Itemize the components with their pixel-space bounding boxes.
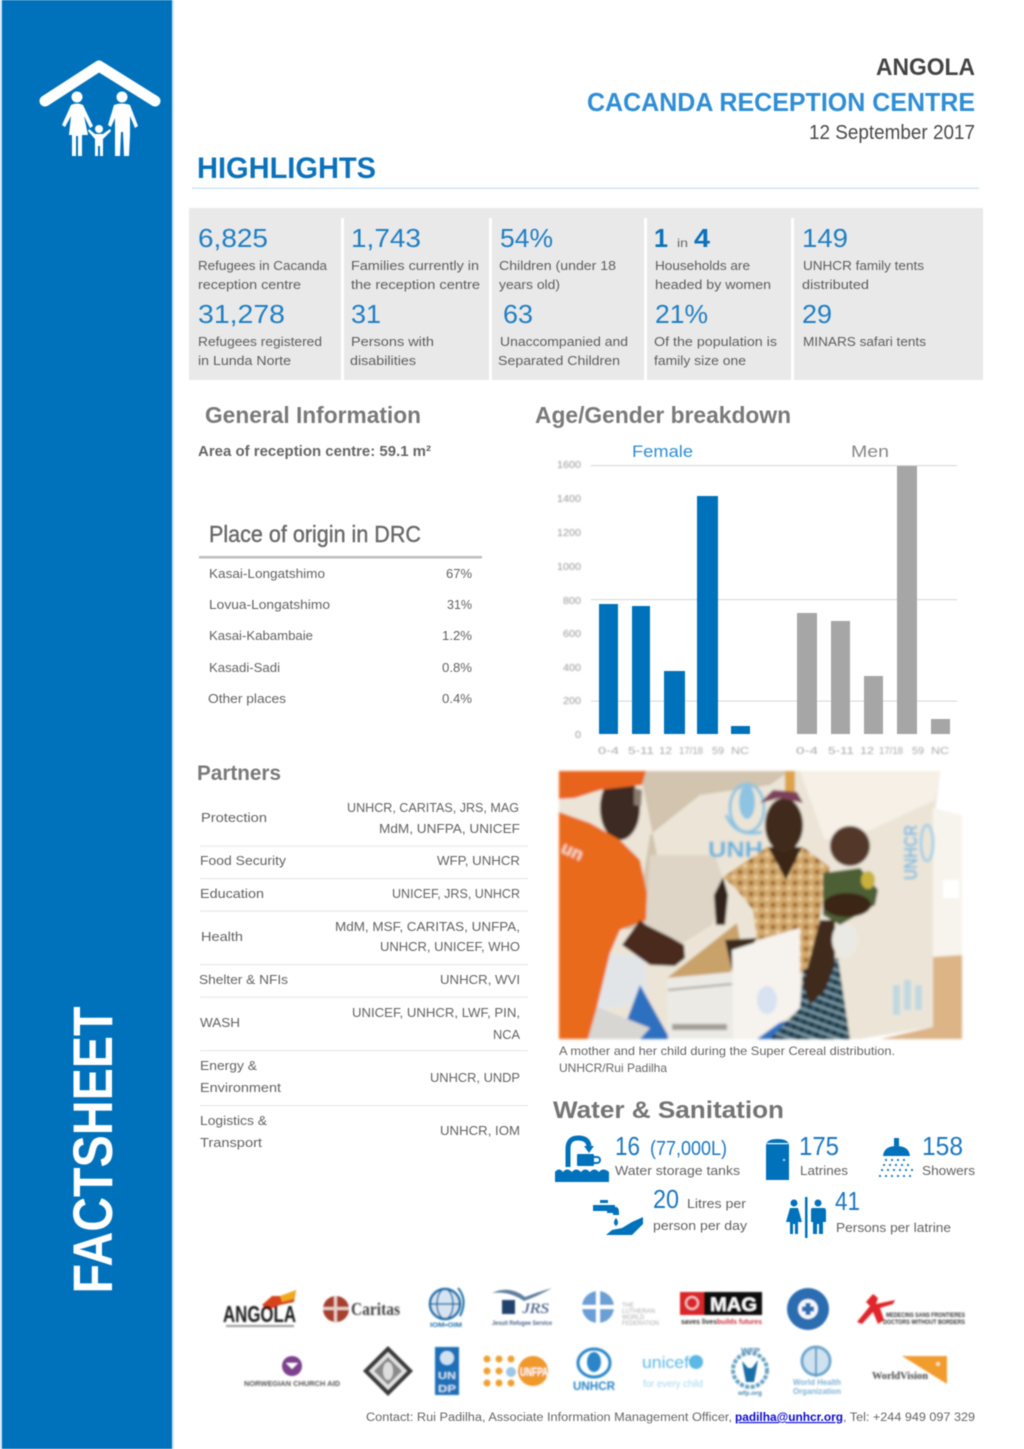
- bar chart: [557, 442, 957, 757]
- logo: Lutheran World Federation: WORLD: [622, 1315, 645, 1321]
- highlight column 3: Separated Children: [498, 353, 620, 368]
- logo: MSF: DOCTORS WITHOUT BORDERS: [883, 1320, 965, 1326]
- partners table rows: MdM, UNFPA, UNICEF: [379, 821, 520, 836]
- highlight column 4: Of the population is: [654, 334, 778, 349]
- highlight column 4: Households are: [655, 258, 750, 273]
- highlight column 5: 29: [802, 299, 832, 329]
- bar chart: 12: [860, 746, 875, 757]
- bar chart: 5-11: [828, 746, 855, 757]
- highlight column 1: in Lunda Norte: [198, 353, 291, 368]
- logo: JRS: JRS: [522, 1301, 550, 1317]
- highlight column 5: [802, 223, 927, 349]
- bar chart: 5-11: [628, 746, 655, 757]
- logo: MAG: builds futures: [717, 1319, 762, 1326]
- photo: mother and child at distribution: UNH: [708, 837, 763, 862]
- partners table rows: UNICEF, JRS, UNHCR: [392, 886, 520, 901]
- sidebar: [0, 0, 174, 1449]
- origin rows: 1.2%: [442, 628, 472, 643]
- icon: family under roof: [45, 66, 155, 156]
- persons per latrine text: [835, 1186, 951, 1235]
- origin rows: Kasadi-Sadi: [209, 660, 280, 675]
- bar chart: NC: [731, 746, 749, 757]
- male bars: [797, 466, 950, 734]
- logo: UNICEF: unicef: [642, 1353, 689, 1372]
- logo: Medecins du Monde: [787, 1288, 829, 1330]
- panel: place of origin: [199, 521, 482, 706]
- partners table rows: UNHCR, UNDP: [430, 1070, 520, 1085]
- bar chart: 0-4: [796, 746, 819, 757]
- partners table rows: [199, 800, 520, 1150]
- highlight column 4: headed by women: [655, 277, 771, 292]
- latrines text: Latrines: [800, 1163, 849, 1178]
- highlight column 4: 1: [654, 223, 668, 253]
- logo: UNDP: UN: [438, 1371, 456, 1382]
- highlight column 3: years old): [499, 277, 560, 292]
- logo: WHO: Organization: [793, 1387, 841, 1396]
- origin rows: Lovua-Longatshimo: [209, 597, 330, 612]
- logo: MSF: MEDECINS SANS FRONTIERES: [886, 1313, 965, 1319]
- highlight column 1: 31,278: [198, 299, 285, 329]
- partners table rows: UNHCR, IOM: [440, 1123, 520, 1138]
- panel: general information: [198, 402, 431, 460]
- logo: Norwegian Church Aid: NORWEGIAN CHURCH AID: [244, 1381, 340, 1388]
- contact line: , Tel: +244 949 097 329: [843, 1412, 975, 1424]
- highlight column 4: family size one: [654, 353, 746, 368]
- logo: WFP: WFP: [741, 1348, 760, 1355]
- photo caption: A mother and her child during the Super Cereal distribution.: [559, 1044, 895, 1058]
- showers text: 158: [922, 1131, 963, 1161]
- panel: place of origin: Place of origin in DRC: [209, 521, 421, 547]
- partners table rows: UNHCR, UNICEF, WHO: [380, 939, 520, 954]
- icon: shower: [879, 1138, 914, 1176]
- area of reception centre: Area of reception centre: 59.1 m²: [198, 443, 431, 460]
- showers text: [922, 1131, 976, 1178]
- partners table rows: Environment: [200, 1080, 281, 1095]
- logo: Lutheran World Federation: THE: [622, 1303, 634, 1309]
- bar chart: 1200: [557, 528, 581, 539]
- persons per latrine text: 41: [835, 1186, 860, 1216]
- bar chart: 1000: [557, 562, 581, 573]
- logo: UNHCR: UNHCR: [573, 1379, 615, 1393]
- partners table rows: Energy &: [200, 1058, 257, 1073]
- bar chart: 800: [563, 596, 581, 607]
- origin rows: 0.8%: [442, 660, 472, 675]
- highlight column 3: Children (under 18: [499, 258, 616, 273]
- logo: MAG: saves lives: [681, 1319, 717, 1326]
- partner logos: [223, 1288, 965, 1397]
- highlight column 3: Unaccompanied and: [500, 334, 628, 349]
- bar chart: 17/18: [679, 746, 703, 757]
- partners table rows: WASH: [200, 1015, 240, 1030]
- persons per latrine text: Persons per latrine: [836, 1220, 951, 1235]
- bar chart: 1400: [557, 494, 581, 505]
- bar chart: 0-4: [598, 746, 620, 757]
- bar chart: 0: [575, 730, 581, 741]
- logo: diamond: [363, 1346, 413, 1396]
- highlight column 3: [498, 223, 628, 368]
- logo: Lutheran World Federation: [581, 1289, 659, 1327]
- partners table rows: Education: [200, 886, 264, 901]
- country: ANGOLA: [876, 54, 975, 81]
- highlight column 4: 21%: [655, 299, 708, 329]
- highlight column 1: 6,825: [198, 223, 268, 253]
- latrines text: 175: [799, 1131, 839, 1161]
- logo: IOM: IOM•OIM: [430, 1323, 462, 1329]
- partners table rows: WFP, UNHCR: [437, 853, 520, 868]
- bar chart: 400: [563, 663, 581, 674]
- origin rows: 67%: [446, 566, 472, 581]
- highlight column 5: MINARS safari tents: [803, 334, 927, 349]
- showers text: Showers: [922, 1163, 976, 1178]
- icon: latrine door: [766, 1139, 789, 1180]
- origin rows: Other places: [208, 691, 287, 706]
- litres per person text: [653, 1184, 748, 1233]
- highlight column 3: 54%: [500, 223, 553, 253]
- bar chart: NC: [931, 746, 949, 757]
- logo: World Vision: WorldVision: [872, 1371, 928, 1382]
- logo: WHO: World Health: [793, 1378, 841, 1387]
- logo: MAG: MAG: [710, 1295, 757, 1316]
- logo: UNHCR: [573, 1349, 615, 1393]
- logo: UNDP: [435, 1347, 459, 1395]
- icon: female and male figures: [786, 1197, 826, 1238]
- origin rows: 31%: [447, 597, 472, 612]
- centre name: CACANDA RECEPTION CENTRE: [587, 87, 975, 117]
- highlight column 5: UNHCR family tents: [803, 258, 925, 273]
- photo: mother and child at distribution: UNHCR: [901, 825, 921, 880]
- origin rows: Kasai-Longatshimo: [209, 566, 325, 581]
- logo: Caritas: Caritas: [351, 1299, 400, 1319]
- water tanks text: 16: [615, 1131, 640, 1161]
- logo: JRS: Jesuit Refugee Service: [492, 1321, 553, 1327]
- logo: JRS: [492, 1288, 553, 1327]
- highlight column 1: Refugees in Cacanda: [198, 258, 328, 273]
- bar chart: 59: [712, 746, 724, 757]
- female bars: [599, 496, 750, 734]
- photo caption: UNHCR/Rui Padilha: [559, 1061, 667, 1075]
- partners table rows: Shelter & NFIs: [199, 972, 289, 987]
- litres per person text: person per day: [653, 1218, 748, 1233]
- bar chart: Female: [632, 442, 693, 461]
- highlight column 2: [350, 223, 480, 368]
- highlight column 2: Families currently in: [351, 258, 479, 273]
- partners table rows: Transport: [200, 1135, 262, 1150]
- highlight column 3: 63: [503, 299, 533, 329]
- photo: mother and child at distribution: [558, 771, 962, 1039]
- icon: tap and cup over water: [555, 1138, 609, 1182]
- logo: Lutheran World Federation: LUTHERAN: [622, 1309, 655, 1315]
- partners table rows: UNICEF, UNHCR, LWF, PIN,: [352, 1005, 520, 1020]
- partners table rows: MdM, MSF, CARITAS, UNFPA,: [335, 919, 520, 934]
- highlight column 4: in: [677, 236, 688, 250]
- logo: Lutheran World Federation: FEDERATION: [622, 1321, 659, 1327]
- logo: World Vision: [872, 1356, 947, 1384]
- date: 12 September 2017: [809, 122, 975, 144]
- icon: tap over hand: [593, 1200, 643, 1235]
- logo: Norwegian Church Aid: [244, 1356, 340, 1388]
- partners table rows: UNHCR, WVI: [440, 972, 520, 987]
- logo: UNFPA: [484, 1356, 548, 1386]
- litres per person text: 20: [653, 1184, 679, 1214]
- bar chart: 1600: [557, 460, 581, 471]
- highlight column 2: disabilities: [350, 353, 417, 368]
- highlight column 2: 1,743: [351, 223, 421, 253]
- logo: MSF: [857, 1294, 965, 1326]
- bar chart: 59: [912, 746, 924, 757]
- logo: WFP: [733, 1348, 767, 1397]
- highlights heading: HIGHLIGHTS: [197, 152, 376, 185]
- contact line: [366, 1412, 975, 1424]
- origin rows: Kasai-Kabambaie: [209, 628, 313, 643]
- highlight column 2: 31: [351, 299, 381, 329]
- partners table rows: Health: [201, 929, 243, 944]
- logo: Caritas: [323, 1296, 400, 1323]
- highlight column 1: [198, 223, 328, 368]
- partners table rows: Logistics &: [200, 1113, 267, 1128]
- water tanks text: (77,000L): [650, 1138, 727, 1160]
- panel: partners: [197, 762, 528, 1150]
- photo: mother and child at distribution: un: [558, 837, 587, 865]
- highlight column 2: Persons with: [351, 334, 434, 349]
- bar chart: 12: [659, 746, 673, 757]
- bar chart: 17/18: [879, 746, 903, 757]
- highlight column 5: distributed: [802, 277, 869, 292]
- contact line: padilha@unhcr.org: [735, 1412, 843, 1424]
- logo: MAG: [680, 1292, 762, 1326]
- latrines text: [799, 1131, 849, 1178]
- origin rows: [208, 566, 472, 706]
- water tanks text: Water storage tanks: [615, 1163, 741, 1178]
- partners table rows: Protection: [201, 810, 267, 825]
- panel: partners: Partners: [197, 762, 281, 785]
- logo: Angola: [223, 1290, 296, 1327]
- logo: UNFPA: UNFPA: [520, 1365, 548, 1379]
- panel: water and sanitation: Water & Sanitation: [553, 1097, 784, 1124]
- highlight column 1: reception centre: [198, 277, 301, 292]
- logo: IOM: [430, 1288, 464, 1329]
- photo caption: [559, 1044, 895, 1075]
- logo: UNDP: DP: [438, 1384, 456, 1395]
- water tanks text: [615, 1131, 741, 1178]
- origin rows: 0.4%: [442, 691, 472, 706]
- highlight column 4: [654, 223, 778, 368]
- litres per person text: Litres per: [687, 1196, 747, 1211]
- bar chart: 600: [563, 629, 581, 640]
- logo: UNICEF: [642, 1353, 703, 1390]
- highlight column 5: 149: [802, 223, 848, 253]
- highlight column 1: Refugees registered: [198, 334, 322, 349]
- logo: WFP: wfp.org: [737, 1391, 762, 1397]
- partners table rows: NCA: [493, 1027, 520, 1042]
- factsheet vertical title: FACTSHEET: [61, 1006, 124, 1294]
- bar chart: 200: [563, 696, 581, 707]
- partners table rows: Food Security: [200, 853, 287, 868]
- panel: water and sanitation: [553, 1097, 976, 1238]
- logo: WHO: [793, 1347, 841, 1396]
- panel: highlights: [189, 208, 983, 380]
- panel: general information: General Information: [205, 402, 421, 428]
- panel: age gender breakdown: [535, 402, 957, 757]
- logo: UNICEF: for every child: [643, 1379, 703, 1390]
- logo: Angola: ANGOLA: [223, 1301, 296, 1327]
- highlight column 4: 4: [694, 223, 711, 253]
- bar chart: Men: [851, 442, 889, 461]
- header: [587, 54, 975, 144]
- panel: age gender breakdown: Age/Gender breakdown: [535, 402, 791, 428]
- contact line: Contact: Rui Padilha, Associate Information Management Officer,: [366, 1412, 732, 1424]
- highlight column 2: the reception centre: [351, 277, 480, 292]
- partners table rows: UNHCR, CARITAS, JRS, MAG: [347, 800, 519, 815]
